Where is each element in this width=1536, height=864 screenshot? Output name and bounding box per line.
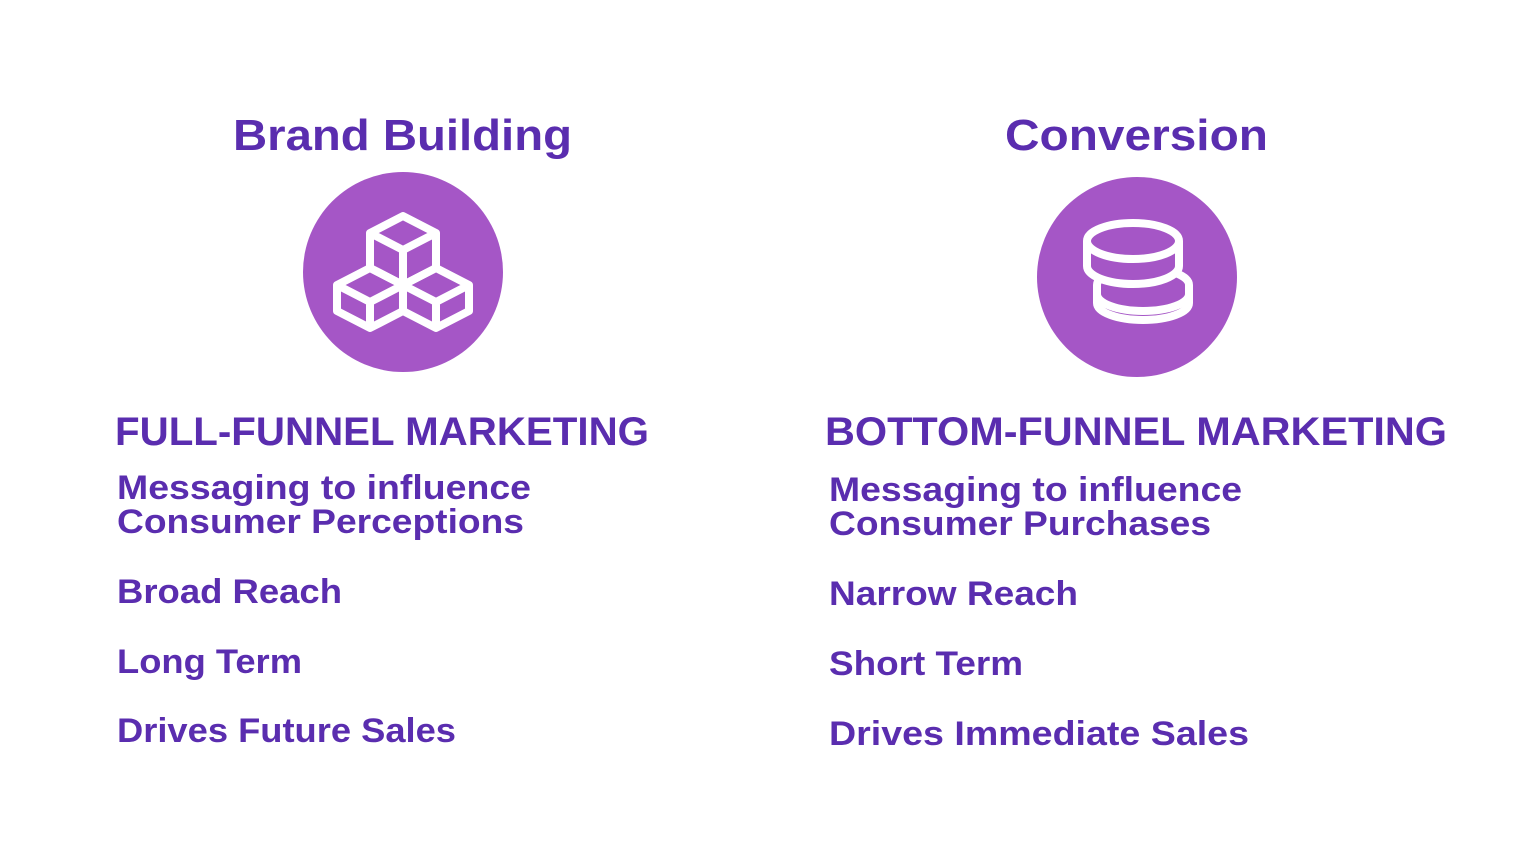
list: conversion traits: Narrow Reach <box>829 575 1078 613</box>
list: brand building traits <box>117 469 531 750</box>
panel: conversion <box>825 111 1447 753</box>
list: conversion traits <box>829 471 1249 753</box>
subheading: full-funnel: FULL-FUNNEL MARKETING <box>115 410 649 454</box>
list: conversion traits: Messaging to influence <box>829 471 1242 509</box>
list: brand building traits: Long Term <box>117 643 302 681</box>
list: brand building traits: Consumer Perceptions <box>117 503 524 541</box>
list: conversion traits: Drives Immediate Sales <box>829 715 1249 753</box>
heading: Conversion: Conversion <box>1005 111 1268 160</box>
list: brand building traits: Broad Reach <box>117 573 342 611</box>
heading: Brand Building: Brand Building <box>233 111 572 160</box>
subheading: bottom-funnel: BOTTOM-FUNNEL MARKETING <box>825 410 1447 454</box>
list: brand building traits: Messaging to influence <box>117 469 531 507</box>
list: brand building traits: Drives Future Sales <box>117 712 456 750</box>
icon: cubes <box>303 172 503 372</box>
panel: brand building <box>115 111 649 750</box>
icon: coins <box>1037 177 1237 377</box>
list: conversion traits: Short Term <box>829 645 1023 683</box>
list: conversion traits: Consumer Purchases <box>829 505 1211 543</box>
